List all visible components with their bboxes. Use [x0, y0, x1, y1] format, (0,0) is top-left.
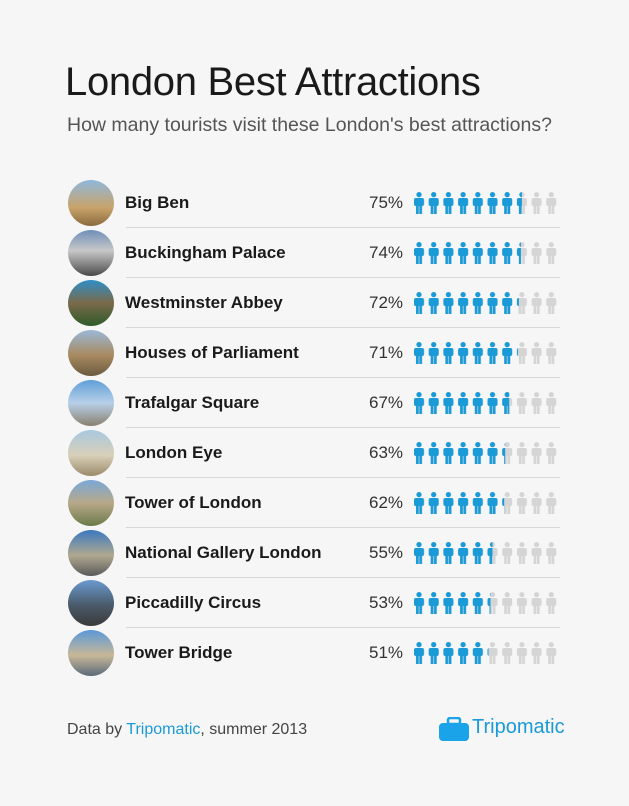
row: London Eye [68, 430, 560, 478]
title: London Best Attractions [65, 60, 481, 104]
percent: 74% [369, 243, 403, 262]
icons [414, 192, 556, 214]
icons [414, 392, 556, 414]
photo: Piccadilly Circus [68, 580, 114, 626]
row: Westminster Abbey [68, 280, 560, 328]
icons [414, 642, 556, 664]
icons [414, 592, 556, 614]
icons [414, 242, 556, 264]
photo: Houses of Parliament [68, 330, 114, 376]
icons [414, 492, 556, 514]
name: Tower Bridge [125, 643, 232, 662]
row: Houses of Parliament [68, 330, 560, 378]
name: London Eye [125, 443, 222, 462]
photo: Westminster Abbey [68, 280, 114, 326]
photo: Big Ben [68, 180, 114, 226]
row: National Gallery London [68, 530, 560, 578]
logo: Tripomatic [439, 716, 565, 741]
logo: Tripomatic: Tripomatic [472, 716, 565, 738]
name: Tower of London [125, 493, 262, 512]
row: Piccadilly Circus [68, 580, 560, 628]
row: Buckingham Palace [68, 230, 560, 278]
row: Trafalgar Square [68, 380, 560, 428]
icons [414, 292, 556, 314]
percent: 71% [369, 343, 403, 362]
photo: Tower of London [68, 480, 114, 526]
percent: 67% [369, 393, 403, 412]
row: Tower of London [68, 480, 560, 528]
footer credit: Data by Tripomatic, summer 2013 [67, 721, 307, 738]
subtitle: How many tourists visit these London's best attractions? [67, 114, 552, 136]
name: Big Ben [125, 193, 189, 212]
photo: Tower Bridge [68, 630, 114, 676]
percent: 72% [369, 293, 403, 312]
percent: 55% [369, 543, 403, 562]
photo: Trafalgar Square [68, 380, 114, 426]
icons [414, 442, 556, 464]
photo: National Gallery [68, 530, 114, 576]
percent: 51% [369, 643, 403, 662]
percent: 53% [369, 593, 403, 612]
percent: 63% [369, 443, 403, 462]
name: Piccadilly Circus [125, 593, 261, 612]
name: Westminster Abbey [125, 293, 283, 312]
icons [414, 542, 556, 564]
name: Houses of Parliament [125, 343, 299, 362]
percent: 62% [369, 493, 403, 512]
percent: 75% [369, 193, 403, 212]
row: Tower Bridge [68, 630, 556, 676]
icons [414, 342, 556, 364]
photo: Buckingham Palace [68, 230, 114, 276]
name: Trafalgar Square [125, 393, 259, 412]
row: Big Ben [68, 180, 560, 228]
name: Buckingham Palace [125, 243, 286, 262]
photo: London Eye [68, 430, 114, 476]
name: National Gallery London [125, 543, 321, 562]
